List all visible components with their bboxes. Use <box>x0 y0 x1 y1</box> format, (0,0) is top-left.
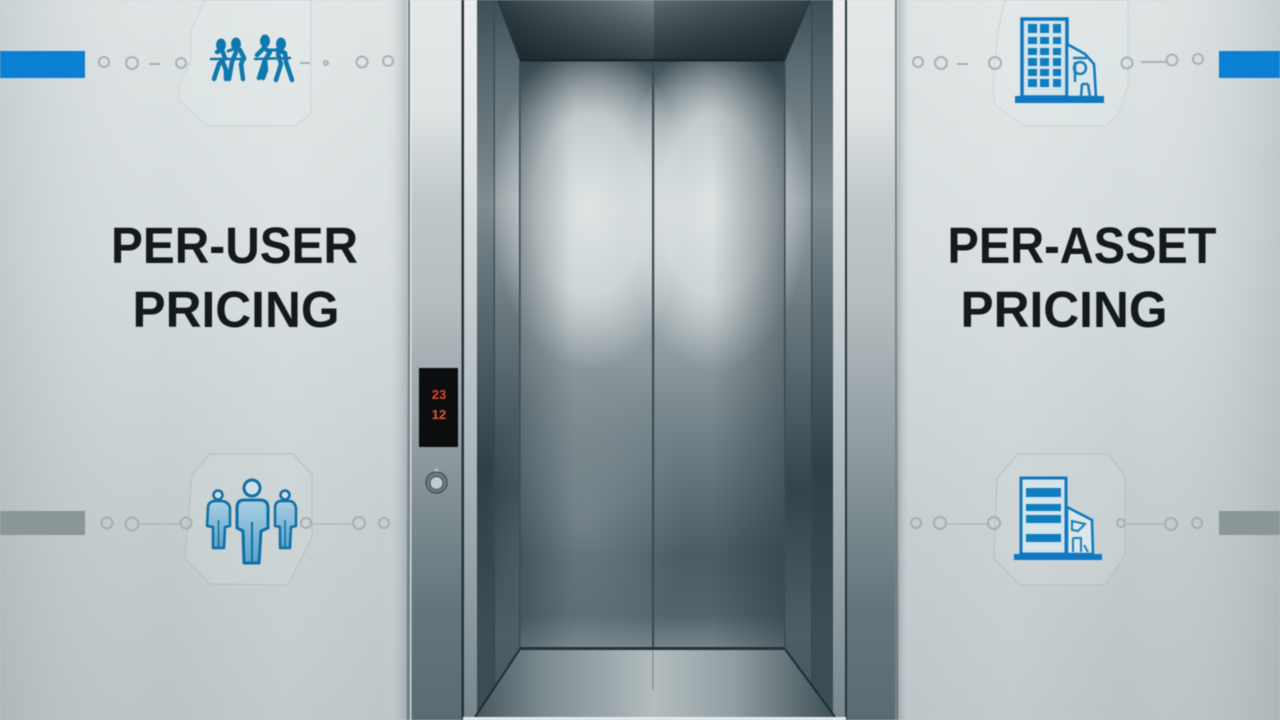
icon tile: top left <box>179 0 311 126</box>
panel: left wall <box>0 0 409 720</box>
connector dots: top right <box>913 54 1203 69</box>
heading: per-asset pricing: PER-ASSET <box>948 217 1216 274</box>
left side wall <box>477 0 520 720</box>
ceiling <box>498 0 810 62</box>
heading: per-user pricing: PRICING <box>132 281 340 338</box>
icon: office building with windows <box>1015 19 1104 103</box>
call button <box>426 468 447 493</box>
marker bar: bottom right gray <box>1219 511 1280 535</box>
floor indicator display <box>419 368 458 447</box>
connector dots: top left <box>99 56 393 69</box>
elevator: frame and cabin <box>407 0 898 720</box>
icon tile: top right <box>993 0 1128 126</box>
marker bar: top right blue <box>1219 51 1280 78</box>
marker bar: top left blue <box>0 51 85 78</box>
connector dots: bottom left <box>102 517 389 530</box>
heading: per-asset pricing <box>948 217 1216 338</box>
floor <box>463 647 846 720</box>
back wall with two panels <box>485 40 810 670</box>
heading: per-user pricing <box>111 217 358 338</box>
marker bar: bottom left gray <box>0 511 85 535</box>
heading: per-user pricing: PER-USER <box>111 217 358 274</box>
icon: people pulling together <box>211 35 292 80</box>
panel: right wall <box>897 0 1280 720</box>
left door frame <box>407 0 477 720</box>
icon: three people outline <box>207 480 296 563</box>
heading: per-asset pricing: PRICING <box>960 281 1168 338</box>
floor indicator display: 12 <box>432 407 446 422</box>
right side wall <box>785 0 833 720</box>
floor indicator display: 23 <box>432 387 446 402</box>
right door frame <box>833 0 898 720</box>
icon tile: bottom left <box>185 454 312 585</box>
icon tile: bottom right <box>994 454 1125 585</box>
connector dots: bottom right <box>911 517 1202 530</box>
icon: office building with floor bands <box>1014 478 1102 560</box>
